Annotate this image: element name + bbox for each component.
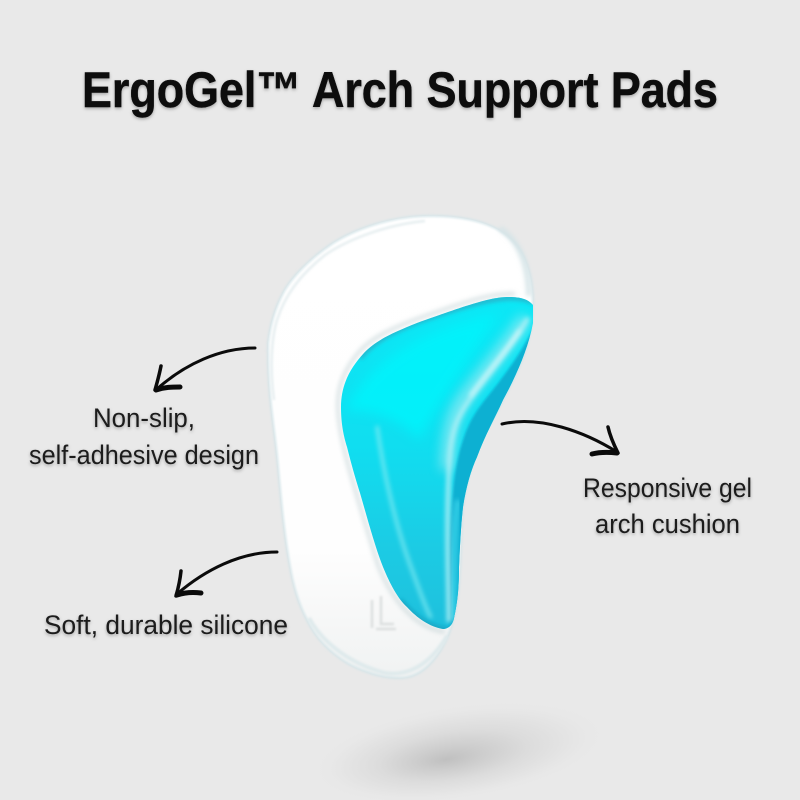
label: soft silicone: Soft, durable silicone xyxy=(44,610,288,640)
gel dark right band xyxy=(448,328,532,628)
label: gel cushion xyxy=(583,473,752,539)
gel bright core xyxy=(350,320,490,434)
embossed L mark xyxy=(372,596,396,629)
gel soft shadow on pad xyxy=(338,294,515,632)
gel inner streak xyxy=(377,426,431,618)
gel lower shade xyxy=(400,600,450,630)
gel ridge sparkle xyxy=(470,330,520,396)
label: non-slip design xyxy=(29,403,259,470)
blue gel arch cushion xyxy=(341,297,533,629)
title: ErgoGel™ Arch Support Pads xyxy=(82,62,718,118)
pad lower edge tint xyxy=(309,618,447,674)
product: arch support pad xyxy=(268,216,540,678)
label: non-slip design: Non-slip, xyxy=(93,403,195,433)
gel ridge highlight xyxy=(448,318,528,622)
pad left rim reflection xyxy=(272,221,425,400)
floor shadow xyxy=(305,684,615,800)
clear silicone pad body xyxy=(268,216,533,678)
gel top edge shade xyxy=(360,298,533,358)
arrow: non-slip design xyxy=(155,348,255,390)
gel broad highlight xyxy=(447,318,526,470)
arrow: soft silicone xyxy=(176,552,277,596)
label: non-slip design: self-adhesive design xyxy=(29,440,259,470)
pad top-right translucent corner xyxy=(500,228,529,296)
gel base xyxy=(341,297,533,629)
label: gel cushion: Responsive gel xyxy=(583,473,752,503)
gel right band mid tone xyxy=(453,500,458,620)
pad translucent rim xyxy=(268,216,533,678)
arrow: gel cushion xyxy=(502,422,618,454)
label: gel cushion: arch cushion xyxy=(595,509,740,539)
